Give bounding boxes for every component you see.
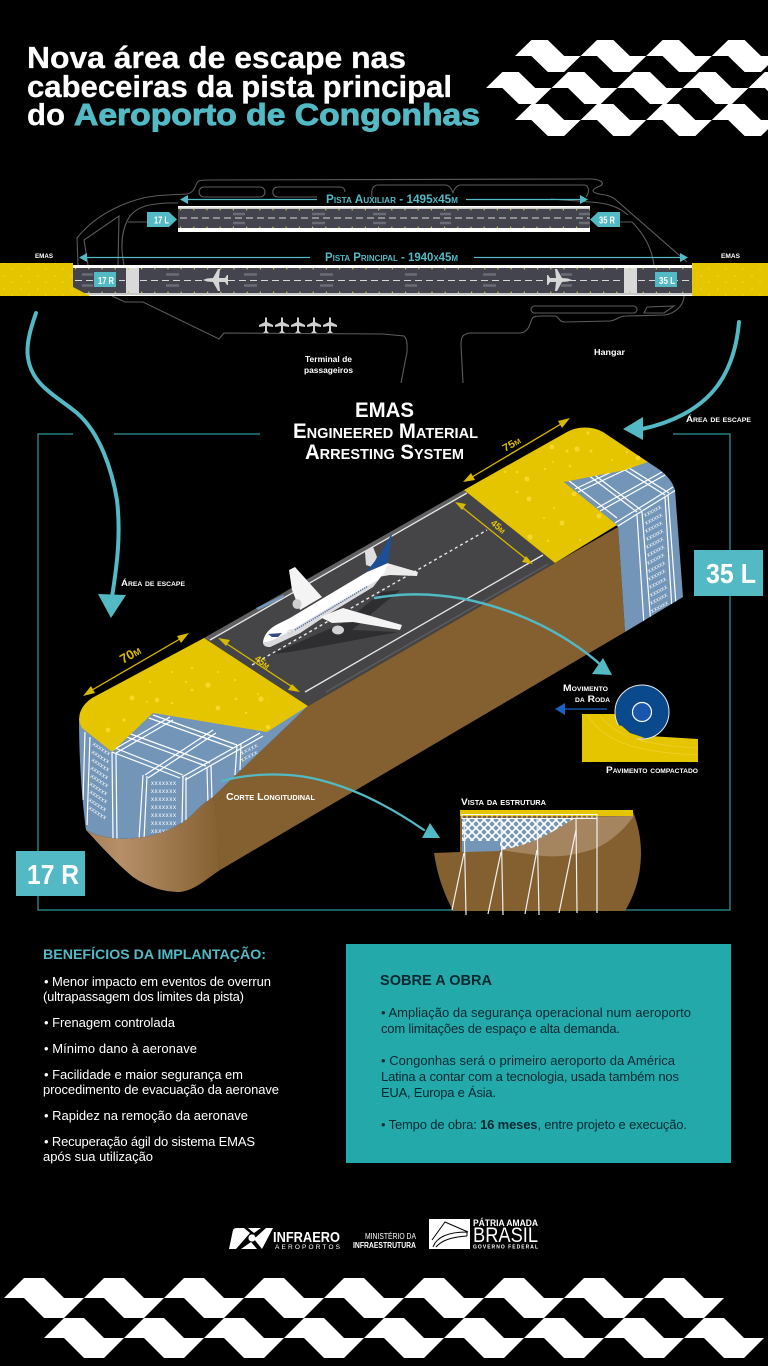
runway length labels and arrows: Pista Auxiliar - 1495x45m: [326, 194, 458, 206]
structure view detail: [434, 797, 641, 915]
EMAS heading: Arresting System: [305, 441, 464, 464]
logo: Infraero: INFRAERO: [273, 1229, 340, 1246]
panel: sobre a obra: • Ampliação da segurança operacional num aeroporto: [381, 1005, 691, 1020]
section frame: [38, 434, 730, 910]
blue face left: [79, 690, 308, 839]
panel: sobre a obra: • Tempo de obra: 16 meses, entre projeto e execução.: [381, 1117, 687, 1132]
benefits block: procedimento de evacuação da aeronave: [43, 1082, 279, 1097]
white structure grid left: xxxxxx: [87, 806, 107, 821]
white structure grid right: xxxxxx: [643, 505, 663, 519]
dimension arrows: [83, 418, 570, 696]
panel: sobre a obra: Latina a contar com a tecnologia, usada também nos: [381, 1069, 680, 1084]
aircraft illustration: [256, 533, 418, 654]
yellow zone 35L: [464, 428, 648, 563]
title: Aeroporto de Congonhas: [74, 97, 480, 132]
logo: Ministério da Infraestrutura: INFRAESTRUTURA: [353, 1241, 416, 1250]
benefits block: • Mínimo dano à aeronave: [44, 1041, 197, 1056]
white structure grid left: xxxxxx: [88, 790, 108, 805]
white structure grid left: xxxxxxx: [151, 797, 176, 803]
panel: sobre a obra: • Congonhas será o primeiro aeroporto da América: [381, 1053, 676, 1068]
hangar label: Hangar: [594, 348, 625, 357]
yellow zone 17R: [79, 638, 308, 752]
escape area labels: [121, 414, 751, 588]
white structure grid left: xxxxxxx: [151, 781, 176, 787]
white structure grid left: xxxxxxx: [151, 805, 176, 811]
white structure grid left: xxxxxxx: [151, 813, 176, 819]
white structure grid right: xxxxxx: [647, 569, 667, 583]
runway direction tags: 17 L: [154, 216, 169, 226]
runway length labels and arrows: [79, 194, 688, 264]
EMAS zones on plan: EMAS: [35, 253, 54, 260]
dimension arrows: 45m: [252, 654, 272, 672]
longitudinal cut label and arrow: Corte Longitudinal: [226, 792, 316, 803]
benefits block: • Recuperação ágil do sistema EMAS: [44, 1134, 255, 1149]
arrow: right escape area: [623, 322, 739, 440]
escape area labels: Área de escape: [121, 578, 185, 588]
white structure grid left: xxxxxx: [90, 758, 110, 773]
escape area labels: Área de escape: [686, 414, 751, 424]
runway surface: [204, 490, 555, 706]
logo: Infraero: AEROPORTOS: [275, 1244, 341, 1251]
runway: auxiliary: [178, 206, 590, 232]
white structure grid right: xxxxxx: [645, 529, 665, 543]
benefits block: após sua utilização: [43, 1149, 153, 1164]
white structure grid right: xxxxxx: [646, 553, 666, 567]
logo: Pátria Amada Brasil: BRASIL: [473, 1224, 538, 1247]
white structure grid left: xxxxx: [240, 750, 259, 764]
blue face right: [564, 462, 683, 632]
white structure grid right: xxxxxx: [646, 545, 666, 559]
white structure grid left: xxxxxx: [90, 750, 110, 765]
runway direction tags: 17 R: [98, 276, 115, 287]
end labels 17 R and 35 L: 17 R: [27, 859, 79, 890]
white structure grid left: xxxxxxx: [151, 829, 176, 835]
gravel dots: [106, 431, 640, 732]
white structure grid right: xxxxxx: [649, 585, 669, 599]
EMAS heading: Engineered Material: [293, 420, 478, 443]
white structure grid right: xxxxxx: [645, 537, 665, 551]
wheel movement detail: [555, 683, 698, 775]
end labels 17 R and 35 L: [16, 550, 763, 896]
white structure grid left: xxxxxxx: [151, 789, 176, 795]
runway length labels and arrows: Pista Principal - 1940x45m: [325, 252, 458, 264]
white structure grid left: [83, 715, 263, 840]
bottom calçada pattern: [4, 1278, 764, 1358]
longitudinal cut label and arrow: [222, 774, 440, 838]
arrow: plane to wheel detail: [375, 594, 612, 675]
runway direction tags: [94, 212, 677, 287]
panel: sobre a obra: com limitações de espaço e alta demanda.: [381, 1021, 620, 1036]
structure view detail: Vista da estrutura: [461, 797, 546, 808]
logo: Ministério da Infraestrutura: [353, 1232, 417, 1250]
terminal label: Terminal de: [305, 355, 353, 364]
title: cabeceiras da pista principal: [27, 69, 452, 104]
logo: Pátria Amada Brasil: [429, 1218, 538, 1250]
white structure grid right: xxxxxx: [650, 601, 670, 615]
benefits block: • Menor impacto em eventos de overrun: [44, 974, 271, 989]
title: [27, 40, 480, 132]
logo: Pátria Amada Brasil: PÁTRIA AMADA: [473, 1218, 538, 1229]
dimension arrows: 45m: [488, 518, 508, 537]
EMAS zones on plan: EMAS: [721, 253, 741, 260]
EMAS zones on plan: [0, 253, 768, 296]
white structure grid left: xxxxxx: [89, 774, 109, 789]
panel: sobre a obra: SOBRE A OBRA: [380, 972, 492, 989]
panel: sobre a obra: [346, 944, 731, 1163]
dimension arrows: 75m: [500, 435, 523, 455]
white structure grid left: xxxxxx: [87, 798, 107, 813]
benefits block: (ultrapassagem dos limites da pista): [43, 989, 244, 1004]
white structure grid left: xxxxx: [240, 743, 259, 757]
runway: main: [73, 265, 692, 296]
arrow: left escape area: [27, 313, 126, 618]
isometric runway block: [79, 428, 683, 892]
dimension arrows: 70m: [117, 643, 144, 667]
benefits block: • Frenagem controlada: [44, 1015, 176, 1030]
logo: Pátria Amada Brasil: GOVERNO FEDERAL: [473, 1244, 538, 1250]
wheel movement detail: Pavimento compactado: [606, 765, 698, 775]
benefits block: BENEFÍCIOS DA IMPLANTAÇÃO:: [43, 945, 266, 962]
white structure grid right: xxxxxx: [644, 521, 664, 535]
white structure grid right: [568, 460, 676, 625]
wheel movement detail: da Roda: [575, 694, 611, 704]
white structure grid right: xxxxxx: [644, 513, 664, 527]
benefits block: [43, 945, 279, 1164]
benefits block: • Facilidade e maior segurança em: [44, 1067, 243, 1082]
white structure grid left: xxxxxx: [91, 742, 111, 757]
brown side: [213, 527, 625, 870]
runway direction tags: 35 L: [659, 276, 675, 287]
top calçada pattern: [486, 40, 768, 136]
title: Nova área de escape nas: [27, 40, 406, 75]
panel: sobre a obra: EUA, Europa e Ásia.: [381, 1085, 496, 1100]
logo: Ministério da Infraestrutura: MINISTÉRIO DA: [365, 1232, 417, 1241]
wheel movement detail: Movimento: [563, 683, 608, 693]
airport road outlines: [77, 179, 687, 383]
title: do: [27, 97, 65, 132]
EMAS heading: EMAS: [355, 399, 414, 422]
white structure grid left: xxxxxx: [88, 782, 108, 797]
parked aircraft at terminal: [259, 317, 337, 333]
end labels 17 R and 35 L: 35 L: [706, 558, 756, 589]
white structure grid left: xxxxxxx: [151, 821, 176, 827]
tan base: [86, 797, 220, 892]
benefits block: • Rapidez na remoção da aeronave: [44, 1108, 248, 1123]
white structure grid right: xxxxxx: [649, 593, 669, 607]
logo: Infraero: [229, 1228, 341, 1251]
runway direction tags: 35 R: [599, 216, 616, 226]
EMAS heading: [293, 399, 478, 464]
white structure grid right: xxxxxx: [648, 577, 668, 591]
terminal label: passageiros: [304, 366, 354, 375]
terminal label: [304, 355, 354, 375]
white structure grid left: xxxxxx: [89, 766, 109, 781]
white structure grid right: xxxxxx: [647, 561, 667, 575]
